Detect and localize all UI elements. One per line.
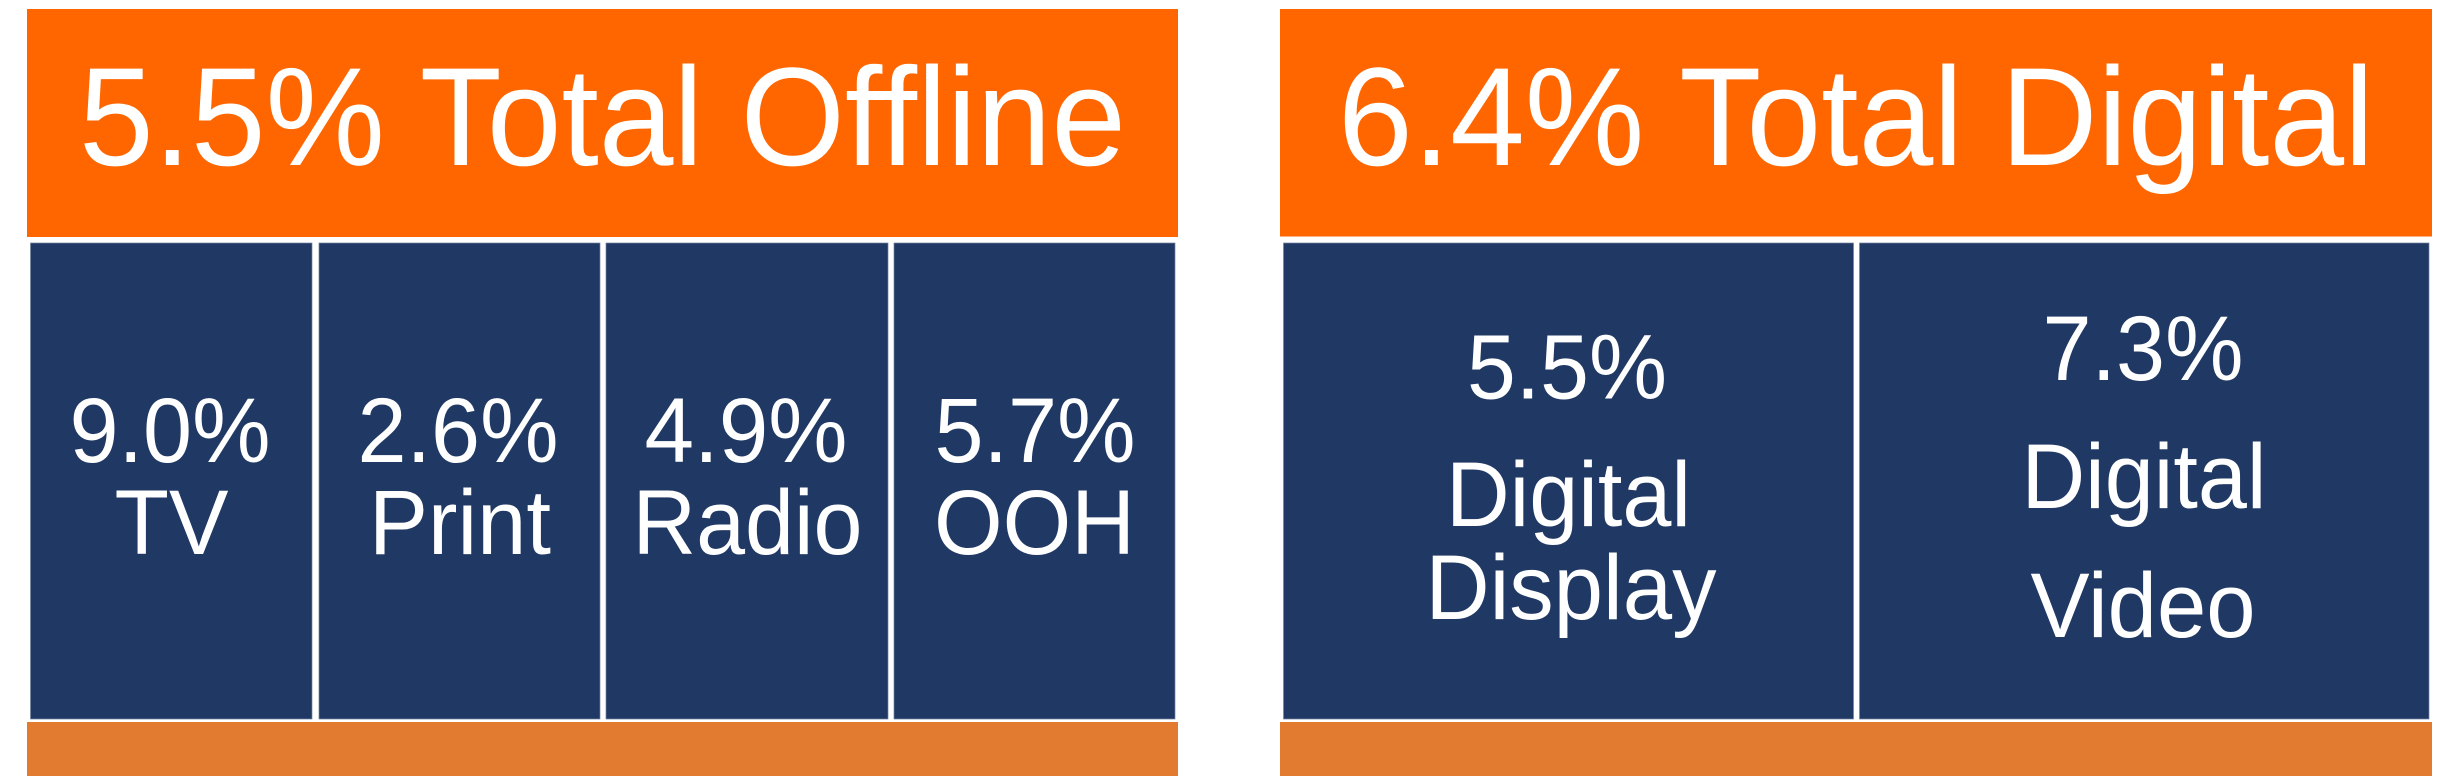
cell: TV bbox=[30, 243, 312, 719]
footer bar: offline bbox=[27, 722, 1178, 776]
cell: Digital Video: 7.3% bbox=[2042, 298, 2244, 400]
cell: Print bbox=[319, 243, 600, 719]
footer bar: digital bbox=[1280, 722, 2432, 776]
cell: Digital Display bbox=[1284, 243, 1854, 719]
heading: 6.4% total digital: 6.4% Total Digital bbox=[1338, 38, 2374, 195]
cell: Digital Display: Display bbox=[1426, 537, 1716, 639]
cell: OOH: 5.7% bbox=[934, 380, 1136, 482]
cell: TV: TV bbox=[114, 472, 228, 574]
cell: Radio: 4.9% bbox=[644, 380, 848, 482]
cell: Digital Video: Video bbox=[2030, 555, 2256, 657]
cell: Digital Display: 5.5% bbox=[1467, 316, 1667, 418]
cell: Digital Display: Digital bbox=[1446, 444, 1691, 546]
cell: Radio: Radio bbox=[632, 472, 862, 574]
cell: OOH bbox=[894, 243, 1175, 719]
cell: Digital Video bbox=[1860, 243, 2429, 719]
cell: TV: 9.0% bbox=[70, 380, 270, 482]
cell: Radio bbox=[606, 243, 888, 719]
panel: total digital bbox=[1280, 9, 2432, 776]
cell: Print: Print bbox=[369, 472, 551, 574]
cell: Print: 2.6% bbox=[358, 380, 558, 482]
heading: 5.5% total offline bbox=[27, 9, 1178, 237]
panel: total offline bbox=[27, 9, 1178, 776]
heading: 6.4% total digital bbox=[1280, 9, 2432, 236]
cell: Digital Video: Digital bbox=[2022, 426, 2266, 528]
cell: OOH: OOH bbox=[934, 472, 1135, 574]
heading: 5.5% total offline: 5.5% Total Offline bbox=[79, 38, 1126, 195]
